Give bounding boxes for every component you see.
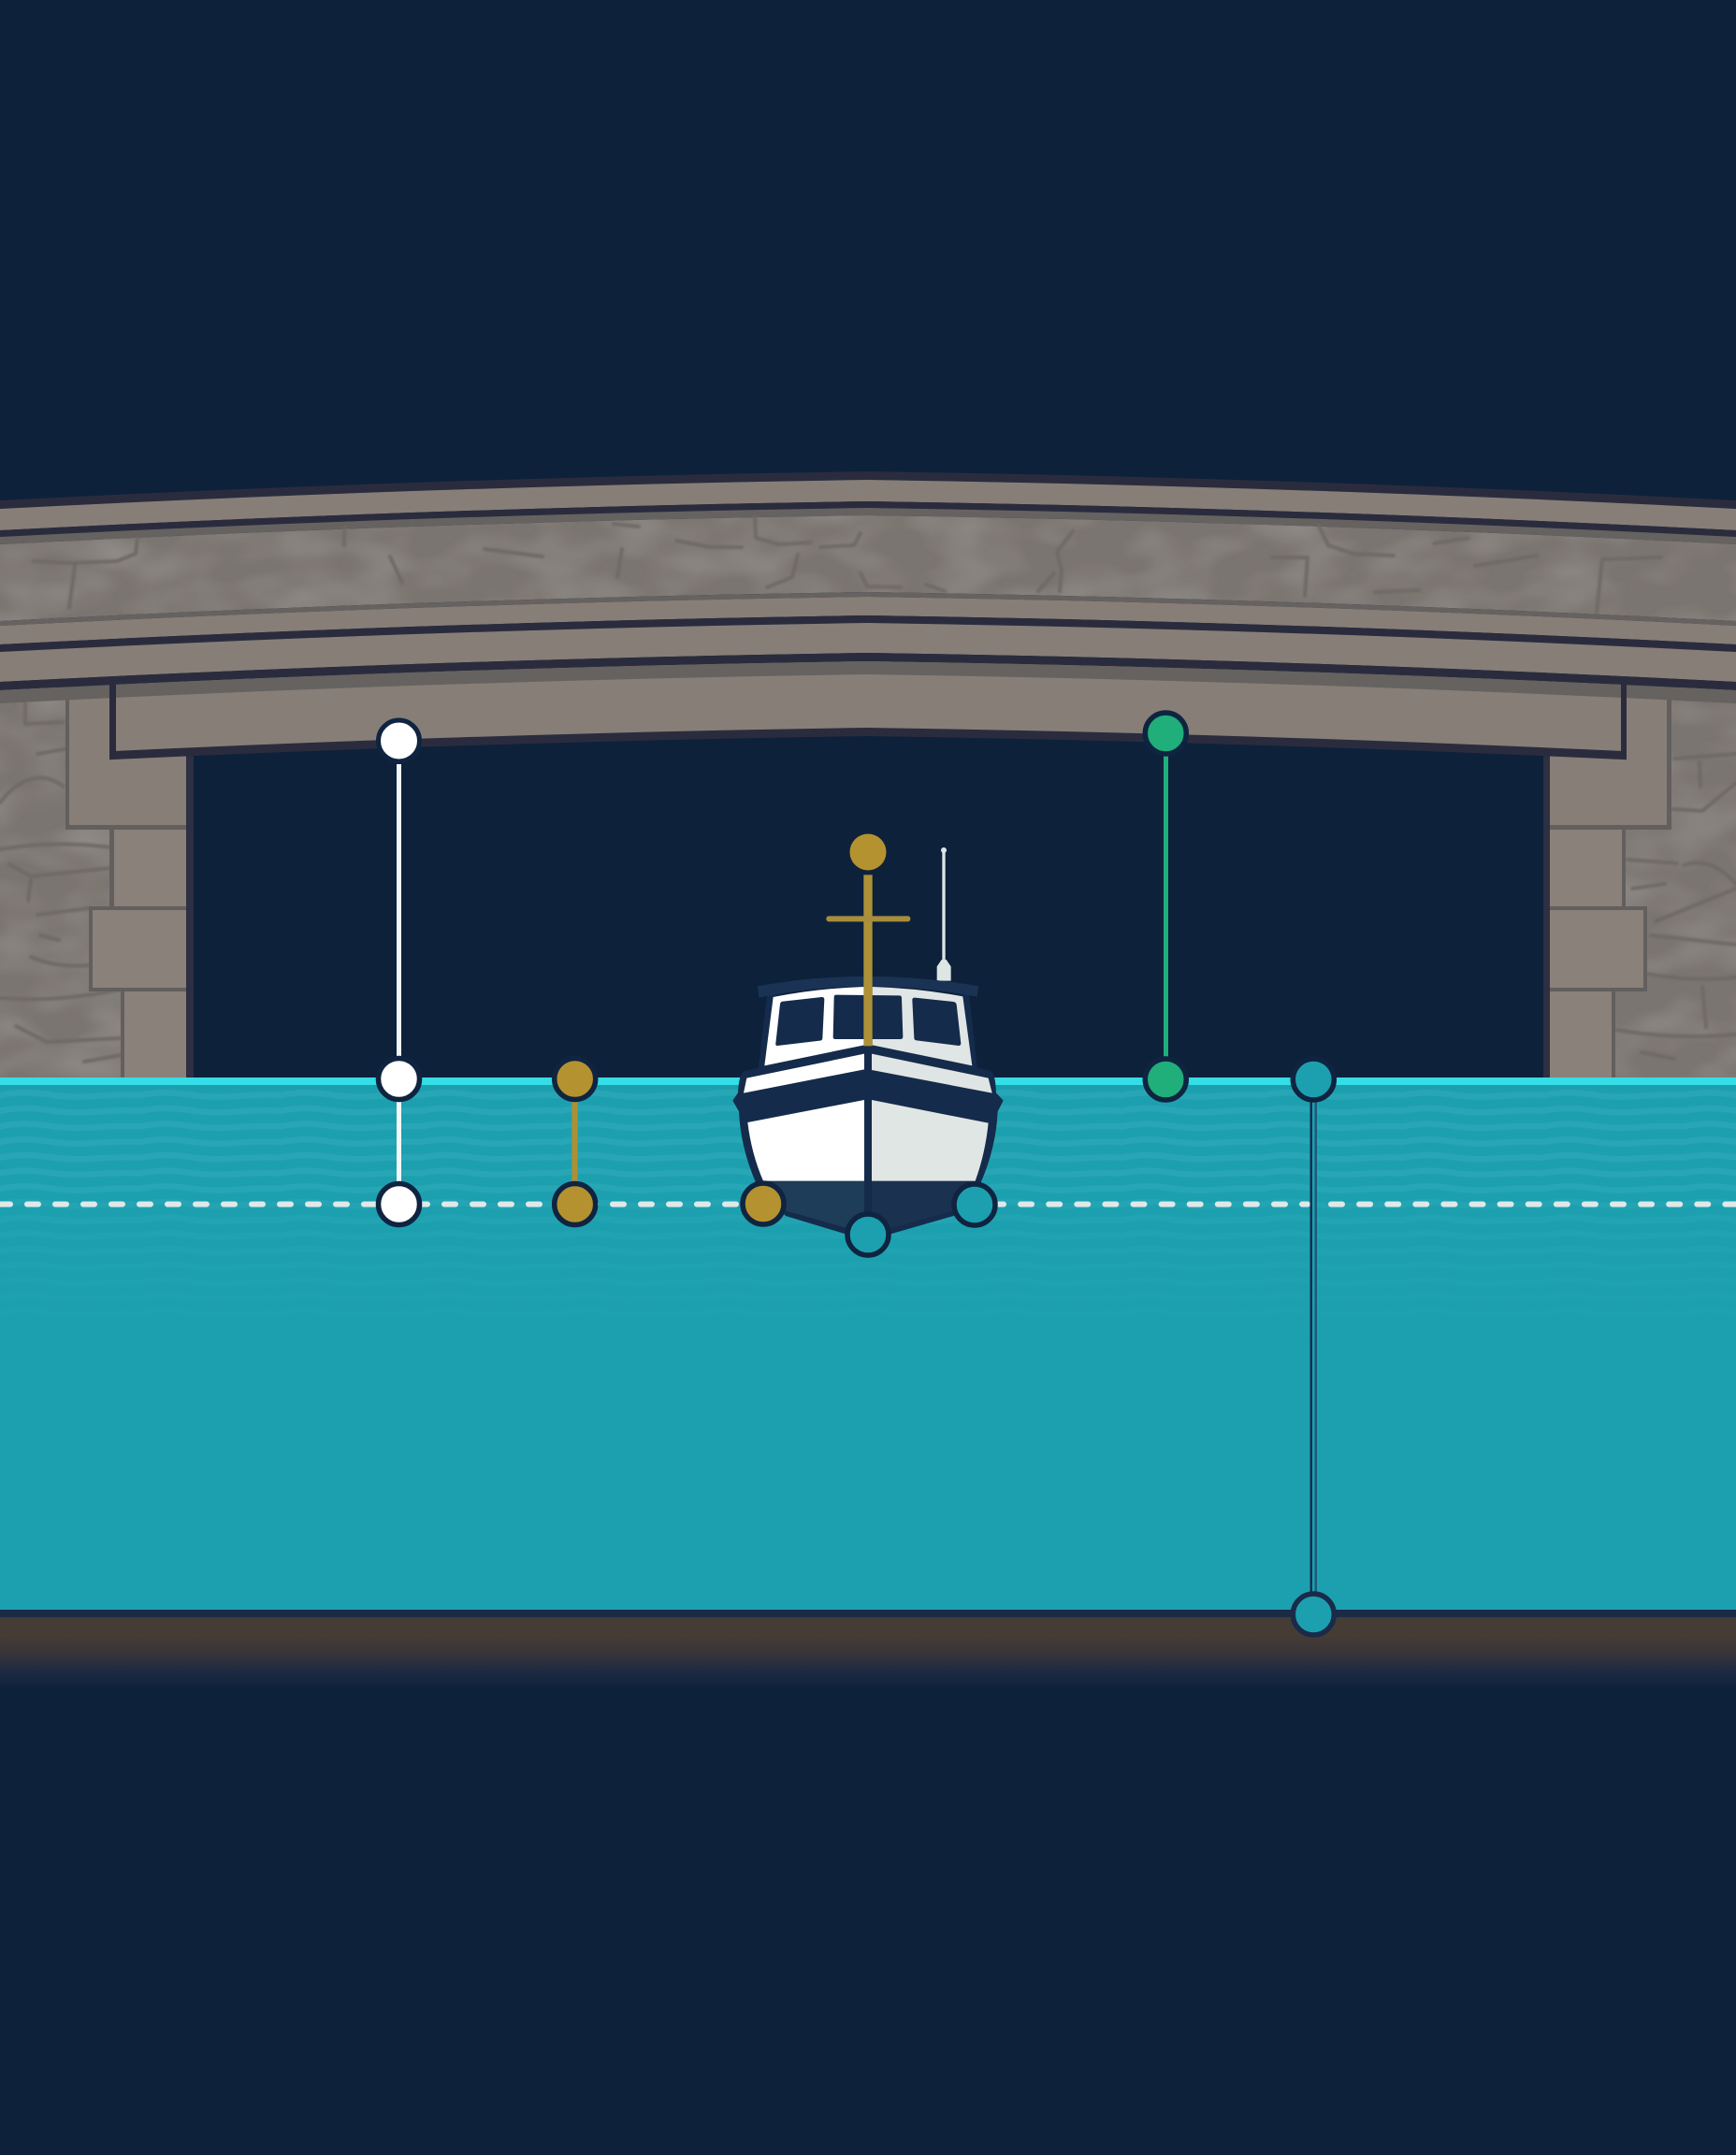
deck top edge [0, 471, 1736, 509]
riverbed mud gradient [0, 1617, 1736, 1690]
left opening edge [186, 739, 194, 1078]
cornice upper band [0, 597, 1736, 644]
white line lower [397, 1102, 401, 1182]
right quoin block 3 [1550, 906, 1647, 991]
cabin front right [873, 987, 972, 1065]
white marker top [378, 720, 419, 761]
white marker surface [378, 1059, 419, 1100]
right abutment rubble stone [1609, 687, 1736, 1080]
teal marker riverbed [1293, 1594, 1334, 1635]
left quoin block 2 [109, 830, 186, 910]
bridge deck [0, 471, 1736, 754]
white marker datum [378, 1184, 419, 1225]
white line upper [397, 764, 401, 1058]
underbody left [770, 1181, 864, 1228]
cornice lower band [0, 623, 1736, 682]
lintel taupe face [116, 661, 1621, 751]
hull front left [747, 1100, 864, 1181]
dashes right section [992, 1201, 1308, 1207]
measurement: green clearance [1145, 713, 1186, 1100]
window left [775, 997, 824, 1046]
left abutment [0, 687, 194, 1080]
right quoin block 4 [1550, 991, 1615, 1078]
green line [1164, 754, 1168, 1059]
coping dark line [0, 501, 1736, 537]
left quoin block 3 [89, 906, 186, 991]
coping shadow [0, 508, 1736, 544]
cornice cast shadow [0, 661, 1736, 703]
deck band right [872, 1054, 992, 1093]
mast crossbar [826, 916, 910, 921]
cornice dark line [0, 615, 1736, 652]
right abutment [1543, 687, 1736, 1080]
parapet coping [0, 480, 1736, 530]
wave ripples [0, 1090, 1736, 1203]
water body [0, 1078, 1736, 1611]
right quoin block 2 [1550, 830, 1626, 910]
gold line [572, 1100, 578, 1184]
boat markers [743, 834, 995, 1255]
dashes far right section [1331, 1201, 1736, 1207]
stone spandrel band [0, 515, 1736, 621]
bridge lintel [109, 661, 1627, 759]
green marker surface [1145, 1059, 1186, 1100]
antenna [937, 847, 951, 981]
lintel end post right [1621, 683, 1627, 754]
deck band left [744, 1054, 864, 1093]
cornice base line [0, 653, 1736, 690]
water [0, 1078, 1736, 1611]
hull outline [732, 1045, 1004, 1239]
gold marker surface [555, 1059, 596, 1100]
measurement: teal water depth [1293, 1059, 1334, 1635]
boat [732, 847, 1004, 1239]
cabin dark sides [759, 994, 977, 1069]
cabin roof [758, 976, 978, 998]
teal marker hull waterline [954, 1184, 995, 1225]
window centre [833, 995, 903, 1039]
lintel dark outline [109, 728, 1627, 759]
lintel end post left [109, 683, 116, 754]
dashes middle section [416, 1201, 739, 1207]
cabin front left [764, 987, 864, 1065]
cornice thin line [0, 592, 1736, 626]
gold marker mast top [849, 834, 887, 870]
measurement: gold tide height [555, 1059, 596, 1225]
left abutment rubble stone [0, 687, 126, 1080]
underbody right [872, 1181, 966, 1228]
waterline dashed reference [0, 1201, 1736, 1207]
right abutment stone cracks [1616, 754, 1736, 1059]
teal line [1309, 1100, 1317, 1594]
riverbed [0, 1610, 1736, 1690]
teal marker surface [1293, 1059, 1334, 1100]
right opening edge [1543, 739, 1550, 1078]
gold marker hull waterline [743, 1183, 784, 1224]
spandrel cracks [34, 517, 1661, 613]
right quoin block 1 [1550, 687, 1671, 830]
hull front right [872, 1100, 989, 1181]
measurement: white air draft [378, 720, 419, 1225]
dashes left section [0, 1201, 376, 1207]
green marker top [1145, 713, 1186, 754]
left quoin block 1 [65, 687, 186, 830]
teal marker keel [847, 1214, 889, 1255]
water surface highlight [0, 1078, 1736, 1085]
riverbed top line [0, 1610, 1736, 1617]
left quoin block 4 [121, 991, 186, 1078]
left abutment stone cracks [0, 703, 122, 1062]
mast [863, 875, 873, 1046]
window right [912, 998, 961, 1046]
gold marker datum [555, 1184, 596, 1225]
